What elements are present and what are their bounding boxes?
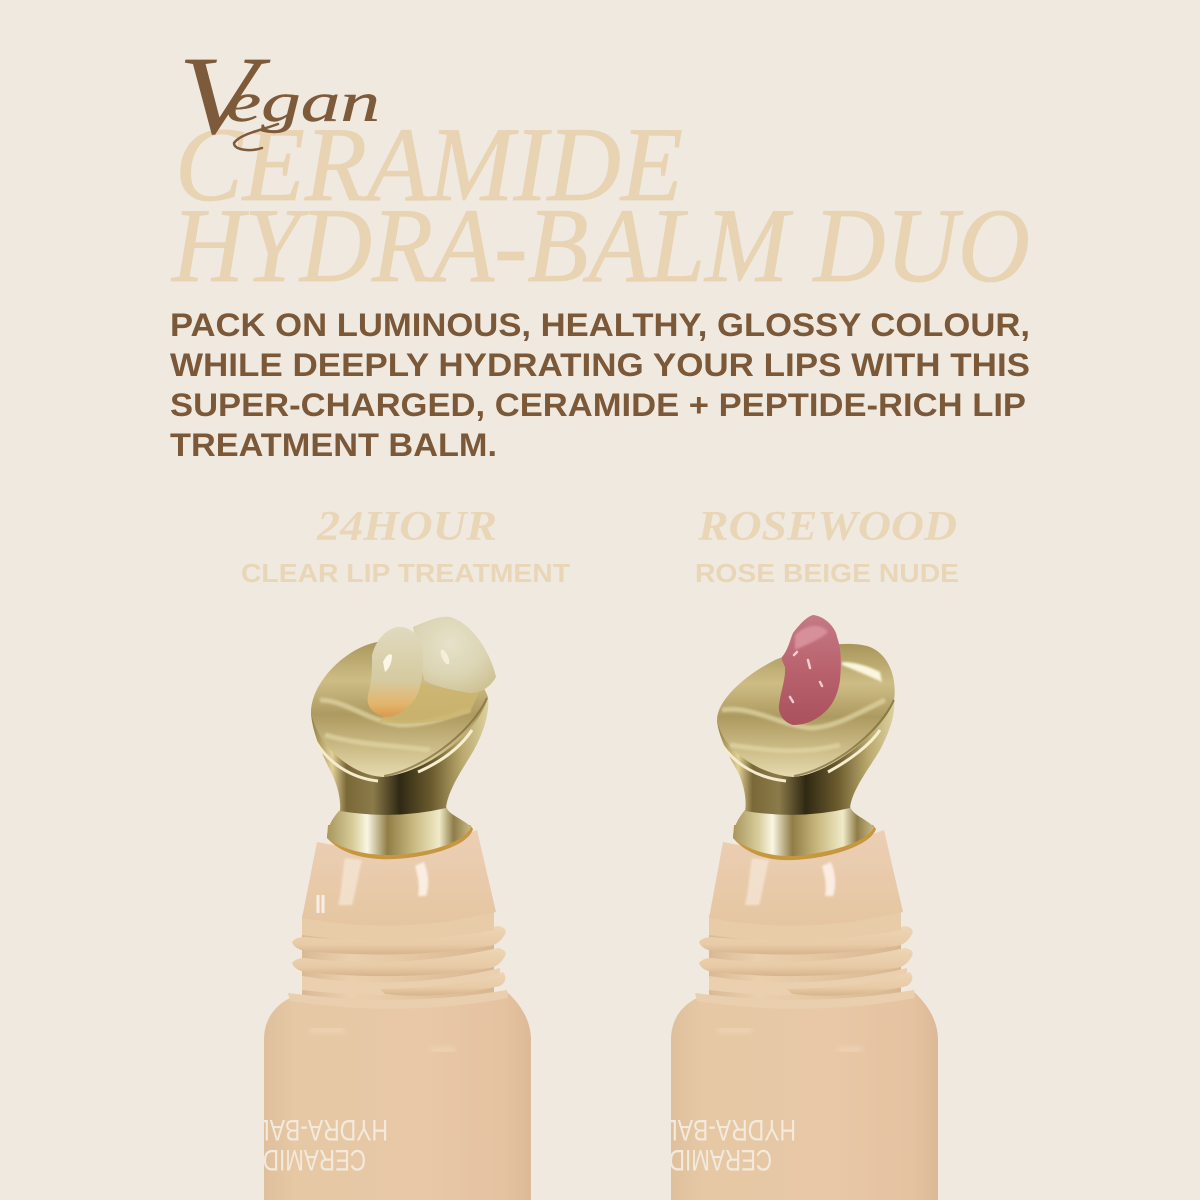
shade label: Rosewood: ROSE BEIGE NUDE [695, 558, 959, 588]
script heading: Vegan: egan [226, 72, 380, 134]
balm swatch: clear [368, 617, 496, 724]
shade label: Rosewood: ROSEWOOD [697, 504, 957, 550]
tube: Rosewood [646, 615, 938, 1200]
description text: SUPER-CHARGED, CERAMIDE + PEPTIDE-RICH LIP [170, 387, 1026, 423]
tube lettering [671, 1120, 794, 1171]
threaded neck [288, 910, 508, 1009]
upper neck [302, 830, 496, 926]
threaded neck [695, 910, 915, 1009]
tube: 24 Hour clear balm [238, 617, 531, 1200]
gold applicator [311, 639, 488, 859]
tube lettering: CERAMIDE [654, 1143, 772, 1176]
shade label: 24 Hour [241, 504, 570, 588]
tube lettering: HYDRA-BALM [238, 1113, 388, 1146]
tube lettering [264, 1120, 386, 1171]
description text: PACK ON LUMINOUS, HEALTHY, GLOSSY COLOUR, [170, 307, 1030, 343]
balm swatch: rose [779, 615, 841, 725]
tube body [238, 992, 531, 1200]
gold applicator [717, 644, 895, 860]
description text: TREATMENT BALM. [170, 427, 497, 463]
tube lettering: CERAMIDE [248, 1143, 366, 1176]
upper neck [709, 830, 903, 926]
tube lettering: HYDRA-BALM [646, 1113, 796, 1146]
headline: Hydra-Balm Duo: HYDRA-BALM DUO [170, 187, 1030, 304]
tube body [646, 992, 938, 1200]
script heading: Vegan: V [178, 34, 272, 158]
description text [170, 307, 1030, 463]
shade label: 24 Hour: CLEAR LIP TREATMENT [241, 558, 570, 588]
shade label: Rosewood [695, 504, 959, 588]
shade label: 24 Hour: 24HOUR [316, 504, 497, 550]
headline: Ceramide: CERAMIDE [175, 106, 683, 223]
description text: WHILE DEEPLY HYDRATING YOUR LIPS WITH THIS [170, 347, 1030, 383]
script heading: Vegan [178, 34, 380, 158]
product title [170, 106, 1030, 304]
